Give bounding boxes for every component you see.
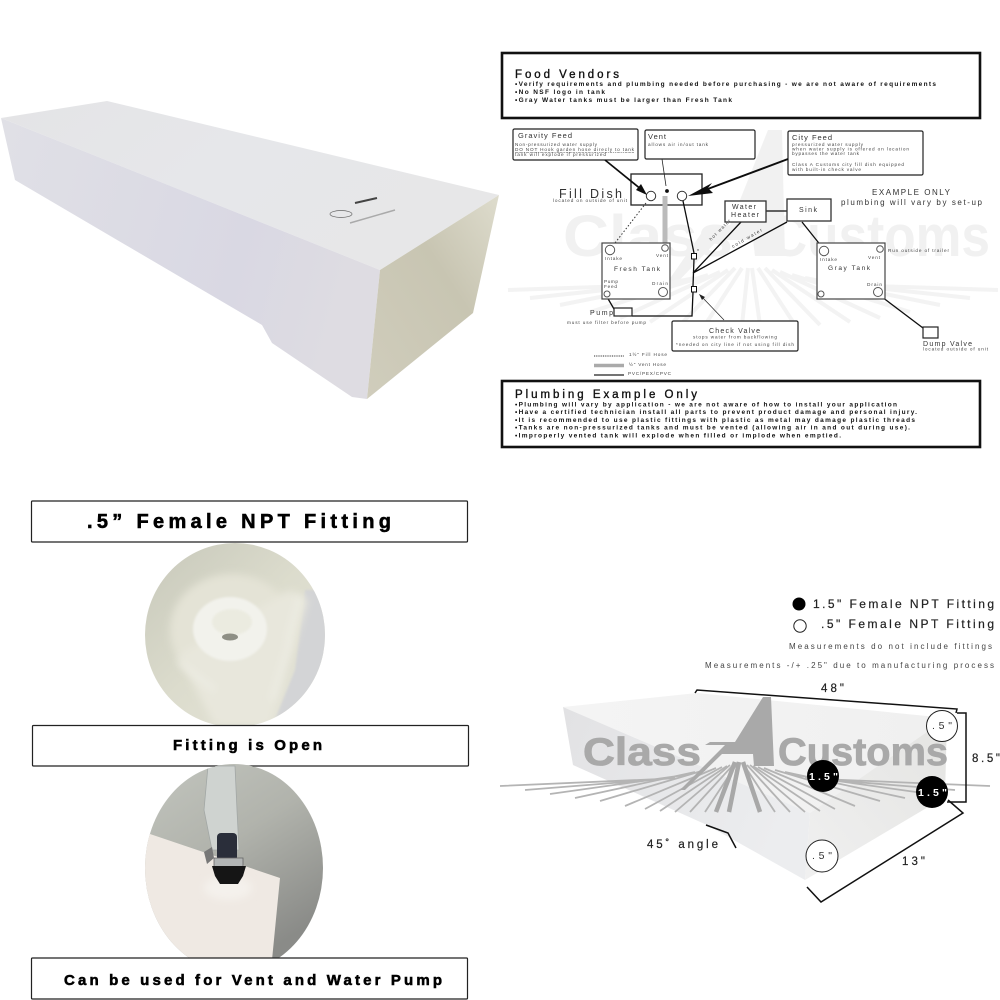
pump <box>567 308 646 325</box>
tank end face <box>367 195 499 399</box>
dump valve <box>923 327 989 352</box>
callout: city feed: City Feed <box>792 133 832 142</box>
callout: city feed: with built-in check valve <box>792 167 861 172</box>
legend: fitting sizes: .5" Female NPT Fitting <box>821 617 994 631</box>
dimension diagram: tank with watermark: Customs <box>778 731 948 774</box>
tank end face <box>805 718 947 880</box>
marker: .5 fitting front <box>806 840 838 872</box>
callout: check valve: stops water from backflowing <box>693 334 777 340</box>
dimension: 48 inch: 48" <box>821 683 844 695</box>
arrow: check valve callout <box>699 294 724 320</box>
callout: city feed: pressurized water supply <box>792 142 864 147</box>
callout: gravity feed: Gravity Feed <box>518 131 572 140</box>
fill dish <box>631 174 702 205</box>
notice lines <box>515 81 936 104</box>
marker: .5 fitting top right <box>926 710 958 742</box>
callout: gravity feed <box>513 129 638 160</box>
legend: fitting sizes: 1.5" Female NPT Fitting <box>813 597 994 611</box>
heading bar: .5 female NPT fitting: .5” Female NPT Fitting <box>87 511 391 533</box>
callout: vent <box>645 130 755 159</box>
watermark rays <box>500 765 990 812</box>
note: example only: EXAMPLE ONLY <box>872 188 951 197</box>
tank top face <box>563 693 947 813</box>
note: example only <box>841 188 983 207</box>
note: measurement disclaimers: Measurements -/+ .25" due to manufacturing process <box>705 661 994 670</box>
notice lines <box>515 402 917 440</box>
photo: white tank <box>1 101 499 399</box>
fitting ring <box>193 597 267 661</box>
pipe labels: hot water <box>708 218 732 242</box>
label bar: can be used for vent and water pump: Can be used for Vent and Water Pump <box>64 972 442 989</box>
callout: city feed: when water supply is offered on location <box>792 146 909 152</box>
gray backdrop wedge <box>276 590 325 716</box>
notice lines: •Tanks are non-pressurized tanks and must be vented (allowing air in and out during use). <box>515 424 910 432</box>
note: measurement disclaimers <box>705 642 994 670</box>
notice lines: •No NSF logo in tank <box>515 89 605 96</box>
marker: 1.5 fitting right <box>916 776 948 808</box>
pipe labels: cold water <box>731 227 763 249</box>
callout: check valve: *needed on city line if not using fill dish <box>676 342 794 347</box>
dimension: 13 inch: 13" <box>902 856 925 868</box>
arrow: gravity feed to fill dish <box>605 160 647 195</box>
legend: hose types: PVC/PEX/CPVC <box>628 371 672 376</box>
tank long side face <box>1 118 380 399</box>
legend: hose types: 1½" Fill Hose <box>629 351 667 357</box>
marker: .5 fitting top right: .5" <box>932 720 952 732</box>
watermark letter A <box>680 697 774 790</box>
glow around fitting <box>211 882 245 894</box>
label: fill dish: located on outside of unit <box>553 198 628 203</box>
fresh tank: Drain <box>652 281 668 286</box>
fresh tank <box>602 243 670 299</box>
notice lines: •It is recommended to use plastic fittings with plastic as metal may damage plastic threads <box>515 417 915 424</box>
callout: vent: Vent <box>648 132 667 141</box>
dump valve: Dump Valve <box>923 341 972 348</box>
check valves <box>692 249 699 292</box>
note: example only: plumbing will vary by set-up <box>841 198 983 207</box>
gray tank <box>817 243 949 299</box>
photo: open fitting close-up <box>140 540 330 726</box>
clear hose <box>204 766 239 850</box>
sink: Sink <box>799 207 818 214</box>
gray tank: Run outside of trailer <box>888 248 949 253</box>
water heater: Heater <box>731 212 760 219</box>
gray tank: Gray Tank <box>828 265 871 272</box>
heading: food vendors: Food Vendors <box>515 69 619 81</box>
label bar: fitting is open: Fitting is Open <box>173 737 322 754</box>
pump: Pump <box>590 310 613 317</box>
label: fill dish: Fill Dish <box>559 187 622 201</box>
marker: 1.5 fitting center: 1.5" <box>809 771 838 783</box>
callout: check valve <box>672 321 798 351</box>
callout: city feed: Class A Customs city fill dish equipped <box>792 162 904 167</box>
legend: fitting sizes <box>792 597 994 632</box>
note: measurement disclaimers: Measurements do not include fittings <box>789 642 992 651</box>
pump: must use filter before pump <box>567 320 646 325</box>
pipe labels <box>708 218 763 249</box>
notice lines: •Improperly vented tank will explode when filled or implode when emptied. <box>515 432 841 440</box>
callout: city feed: bypasses the water tank <box>792 151 860 156</box>
tank top face <box>1 101 499 270</box>
tank label decal <box>330 198 395 223</box>
gray tank: Vent <box>868 255 881 260</box>
water heater: Water <box>732 204 757 211</box>
fresh tank: Pump <box>604 279 618 284</box>
legend: hose types <box>594 351 672 376</box>
gray tank: Intake <box>820 257 837 262</box>
fitting hole <box>222 634 238 640</box>
fresh tank: Vent <box>656 253 669 258</box>
dimension lines <box>695 690 966 902</box>
callout: vent: allows air in/out tank <box>648 142 709 147</box>
raised boss <box>170 574 272 652</box>
notice lines: •Plumbing will vary by application - we are not aware of how to install your application <box>515 402 897 408</box>
hose clamp <box>214 858 243 867</box>
sink <box>787 199 831 221</box>
fresh tank: Feed <box>604 284 617 289</box>
callout: gravity feed: tank will explode if pressurized <box>515 152 606 157</box>
notice lines: •Gray Water tanks must be larger than Fresh Tank <box>515 97 732 104</box>
faint watermark behind plumbing diagram <box>508 130 998 325</box>
tank long side <box>563 707 810 880</box>
heading bar: .5 female NPT fitting <box>32 501 468 542</box>
check valves: * <box>697 249 699 255</box>
marker: 1.5 fitting center <box>807 760 839 792</box>
dimension diagram: tank with watermark <box>500 693 990 880</box>
fresh tank: Intake <box>605 256 622 261</box>
dimension: 45 degree angle: 45˚ angle <box>647 839 718 851</box>
marker: .5 fitting front: .5" <box>812 850 832 862</box>
watermark text: Class <box>583 731 701 774</box>
water heater <box>725 201 766 222</box>
notice lines: •Have a certified technician install all parts to prevent product damage and personal injury. <box>515 409 917 416</box>
pipes and hoses <box>607 196 923 328</box>
heading: plumbing example only: Plumbing Example Only <box>515 389 697 401</box>
arrow: city feed to fill dish <box>688 159 788 196</box>
callout: gravity feed: DO NOT Hook garden hose direcly to tank <box>515 147 635 152</box>
marker: 1.5 fitting right: 1.5" <box>918 787 947 799</box>
plumbing diagram <box>513 129 989 376</box>
tank corner <box>140 834 280 960</box>
fresh tank: Fresh Tank <box>614 266 661 273</box>
panel: plumbing example only notice <box>502 381 980 447</box>
dump valve: located outside of unit <box>923 346 989 352</box>
plastic seam highlights <box>178 595 300 700</box>
panel: food vendors notice <box>502 53 980 118</box>
arrow: vent to fill dish <box>662 159 666 186</box>
callout: gravity feed: Non-pressurized water supply <box>515 142 598 147</box>
legend: hose types: ½" Vent Hose <box>629 361 666 367</box>
faint watermark behind plumbing diagram: Class <box>563 204 733 269</box>
callout: city feed <box>788 131 923 175</box>
notice lines: •Verify requirements and plumbing needed before purchasing - we are not aware of requirements <box>515 81 936 88</box>
label bar: fitting is open <box>32 726 468 766</box>
dimension: 8.5 inch: 8.5" <box>972 753 1000 765</box>
gray tank: Drain <box>867 282 882 287</box>
black fitting <box>212 866 246 884</box>
photo: fitting with hose <box>140 760 330 960</box>
callout: check valve: Check Valve <box>709 328 760 335</box>
label bar: can be used for vent and water pump <box>32 958 468 999</box>
